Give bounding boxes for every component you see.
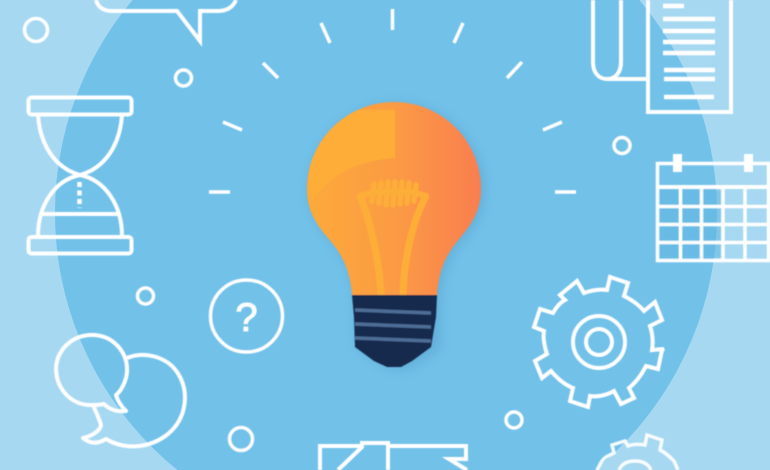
icon: box bottom <box>320 443 467 470</box>
icon: document with scroll <box>593 0 731 112</box>
bulb base <box>352 295 437 367</box>
icon: question mark circle <box>210 280 282 352</box>
bulb shadow <box>310 104 484 369</box>
small circles <box>24 18 630 450</box>
base thread lines <box>355 310 431 341</box>
icon: overlapping chat bubbles <box>56 335 185 446</box>
bulb glass <box>307 102 481 295</box>
icon: calendar <box>658 154 768 260</box>
bulb filament <box>360 182 426 295</box>
icon: large gear <box>534 277 664 407</box>
light rays <box>209 9 576 192</box>
icon: small gear <box>597 435 678 470</box>
icon: speech bubble top <box>96 0 236 41</box>
bulb highlight <box>308 110 395 174</box>
icon: light bulb <box>305 102 481 367</box>
icon: question mark circle: ? <box>235 296 258 340</box>
icon: hourglass <box>28 98 132 254</box>
